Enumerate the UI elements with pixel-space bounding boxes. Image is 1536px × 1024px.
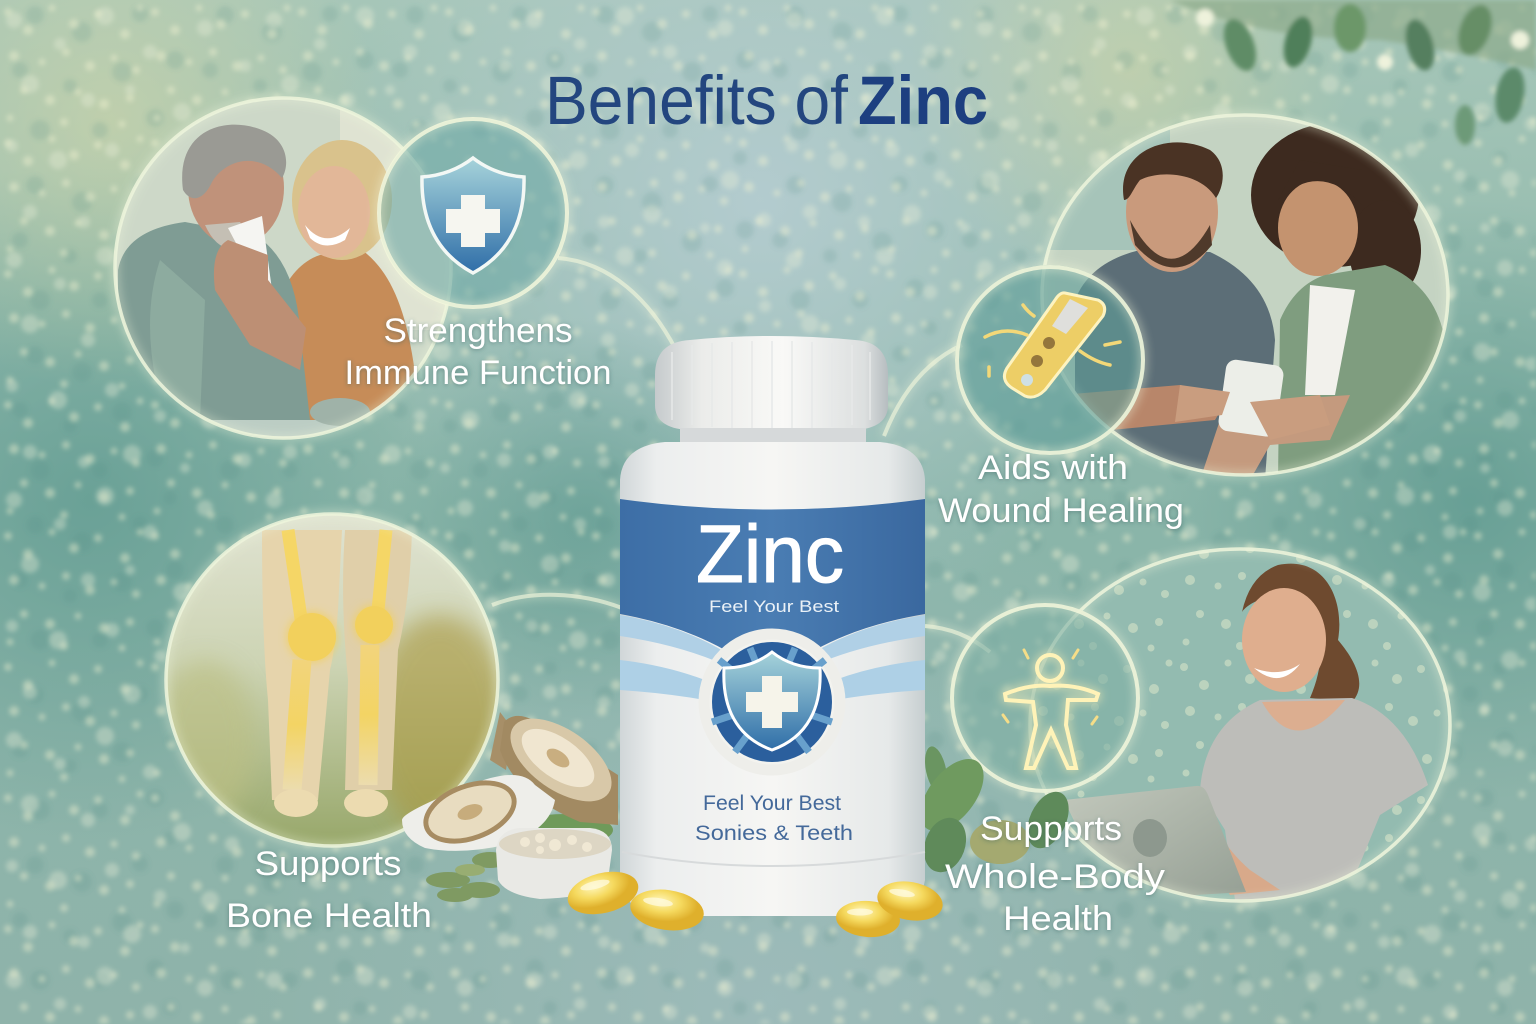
- bottle lower text: [695, 792, 853, 845]
- label: aids with wound healing: [938, 449, 1184, 530]
- label text: Feel Your Best: [709, 597, 839, 616]
- man: [118, 125, 310, 420]
- food: mushrooms, bowl and seeds: [402, 702, 626, 902]
- bottle cap: [655, 336, 888, 430]
- right leg: [343, 530, 412, 817]
- label: supports whole-body health: [945, 810, 1165, 938]
- bottle lower text: Sonies & Teeth: [695, 822, 853, 845]
- panel: bone health photo: [155, 510, 510, 850]
- left leg: [262, 530, 342, 817]
- label: aids with wound healing: Wound Healing: [938, 492, 1184, 530]
- label: supports bone health: [226, 845, 432, 935]
- laptop: [1064, 786, 1246, 900]
- man: [1060, 142, 1275, 480]
- emblem: [704, 634, 840, 770]
- label: strengthens immune function: [344, 312, 612, 392]
- icon: immune shield: [378, 118, 568, 308]
- woman: [1251, 123, 1445, 480]
- label: supports whole-body health: Whole-Body: [945, 858, 1165, 896]
- panel: whole body health photo: [1030, 545, 1455, 905]
- panel: immune function photo: [110, 90, 460, 450]
- icon: bandage: [955, 265, 1145, 455]
- connector lines: [492, 258, 990, 652]
- label: aids with wound healing: Aids with: [978, 449, 1128, 487]
- bottle: [620, 336, 925, 916]
- title: Benefits of: [545, 62, 849, 139]
- label: strengthens immune function: Strengthens: [384, 312, 572, 350]
- bottle lower text: Feel Your Best: [703, 792, 841, 815]
- bandaged arm: [1175, 358, 1350, 480]
- woman: [290, 140, 414, 420]
- label: supports bone health: Supports: [254, 845, 402, 883]
- softgel capsules: [563, 865, 946, 939]
- bottle body: [620, 428, 925, 916]
- icon: glowing body: [950, 603, 1140, 793]
- food: mint leaves: [908, 744, 1077, 878]
- woman at laptop: [1200, 564, 1428, 900]
- label: supports bone health: Bone Health: [226, 897, 432, 935]
- bottle label: [620, 499, 925, 700]
- label: supports whole-body health: Health: [1003, 900, 1113, 938]
- label: strengthens immune function: Immune Function: [344, 354, 612, 392]
- label: supports whole-body health: Suppprts: [980, 810, 1122, 848]
- panel: wound healing photo: [1040, 110, 1450, 480]
- label text: Zinc: [696, 509, 844, 600]
- title: Zinc: [858, 62, 988, 139]
- foliage top right: [1170, 0, 1536, 145]
